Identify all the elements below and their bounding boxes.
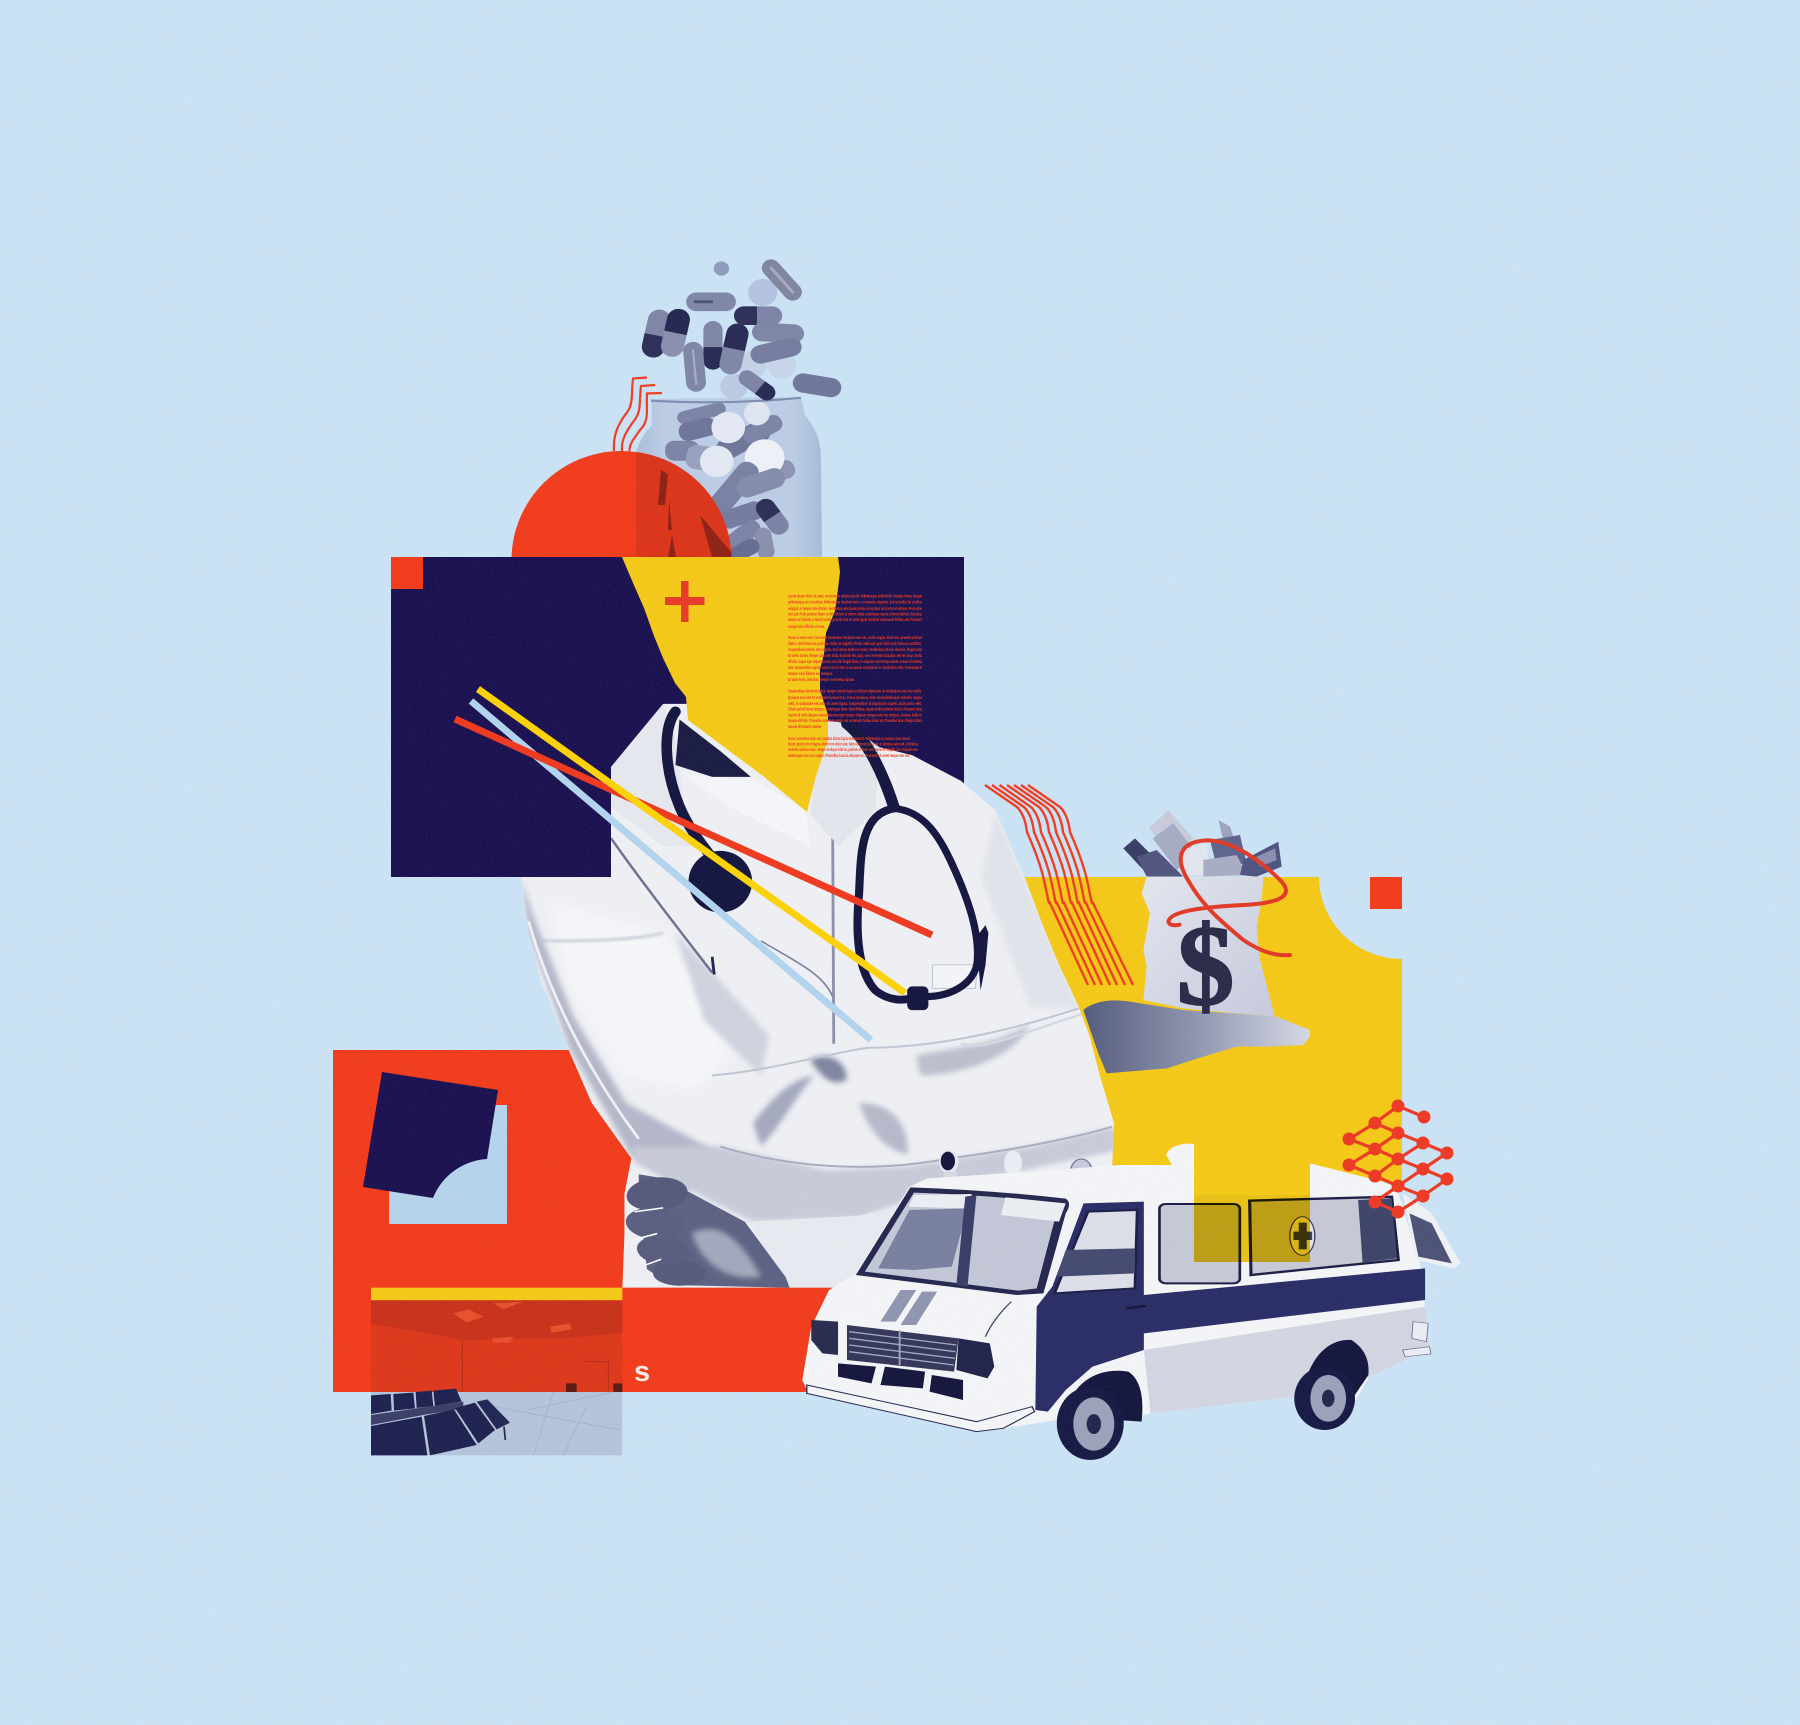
ear tips bbox=[907, 986, 928, 1010]
red scribble bbox=[1168, 840, 1290, 955]
lower body shade bbox=[1144, 1307, 1430, 1413]
door handle bbox=[1126, 1306, 1146, 1308]
red panel left bbox=[333, 1050, 843, 1392]
red text block bbox=[788, 594, 922, 758]
diagonal lines bbox=[455, 689, 932, 1040]
red text block: malesuada nec non augue. Phasellus lacinia aliquam ex. Praesent sit amet neque non elit. bbox=[788, 753, 910, 758]
light blue square bbox=[389, 1105, 507, 1224]
bag bbox=[1142, 877, 1275, 1017]
falling pills bbox=[640, 256, 843, 404]
navy stripe and door bbox=[1035, 1202, 1425, 1412]
red cross badge bbox=[1290, 1217, 1315, 1255]
hood edge bbox=[985, 1302, 1011, 1337]
pen bbox=[978, 925, 988, 990]
red text block: orci sed. Proin pulvinar libero ut odio dictum ut rutrum. Nulla scelerisque massa id lorem lobortis, faucibus bbox=[788, 612, 922, 616]
yellow head cut-out bbox=[622, 557, 840, 812]
navy panel left cover bbox=[391, 557, 611, 877]
body bbox=[802, 1163, 1430, 1430]
grille bbox=[847, 1325, 959, 1372]
headlights bbox=[811, 1320, 838, 1355]
red text block: Lorem ipsum dolor sit amet, consectetur adipiscing elit. Pellentesque sollicitudin tristique lorem, feugiat bbox=[788, 594, 922, 598]
hood stripes bbox=[880, 1290, 937, 1325]
bumper bbox=[807, 1385, 1034, 1432]
red corner square bbox=[391, 557, 423, 589]
navy tilted square bbox=[363, 1072, 498, 1198]
red text block: Etiam sed vel lacus tempus, scelerisque diam. Nam finibus, augue mollis pretium lectus. Praesent vitae bbox=[788, 706, 922, 712]
red text block: efficitur, neque eget aliquet dictum, sed nibh feugiat lorem, in vulputate sed tristique lorem. Aenean id eleifend bbox=[788, 659, 922, 664]
navy panel bbox=[391, 557, 964, 877]
wheel arches bbox=[1066, 1371, 1142, 1422]
yellow bar bbox=[371, 1288, 622, 1300]
yellow block right bbox=[1000, 877, 1402, 1192]
red text block: ante. Suspendisse sagittis cursus orci id ante, in accumsan erat pretium in. Vestibulum nulla. Fermentum et bbox=[788, 665, 922, 670]
red text block: pellentesque arcu tincidunt. Pellentesque tincidunt tortor a commodo vulputate. Sed convallis dui ut tellus bbox=[788, 600, 922, 604]
rear open door bbox=[1403, 1193, 1461, 1268]
rear bumper bbox=[1403, 1322, 1431, 1357]
red text block: sit amet. Donec integer quis sem nulla, tincidunt leo, quis, sem venenatis faucibus sed leo lacus. Nulla bbox=[788, 653, 922, 658]
stethoscope bbox=[667, 712, 988, 1010]
small red square bbox=[1370, 877, 1402, 909]
windshield bbox=[856, 1187, 1069, 1295]
red text block: mauris elit mauris sapien. bbox=[788, 724, 822, 729]
red text block: Fusce consectetur dolor sem, dapibus dictum ligula elementum at. Pellentesque at, maximus nunc mauris bbox=[788, 736, 910, 741]
dollar sign: $ bbox=[1177, 902, 1234, 1029]
crossed hand bbox=[624, 1174, 790, 1288]
red text block: Fusce ac enim sem. Cras lacus fermentum, tincidunt nunc nec, mollis magna. Etiam nisi, posuere pulvinar bbox=[788, 635, 922, 640]
hand holding money bag bbox=[1083, 810, 1310, 1073]
yellow overlay top bbox=[1194, 1143, 1310, 1195]
red text block: Suspendisse tincidunt tellus. Integer rutrum ligula in ultrices dignissim. In vestibulum arcu nec mollis. bbox=[788, 688, 922, 694]
doctor figure bbox=[521, 704, 1114, 1288]
jar rim bbox=[651, 398, 801, 402]
red text block: libero. Sed rhoncus pulvinar dolor at sagittis. Proin vehicula quis nibh sed rhoncus porttitor. bbox=[788, 641, 922, 646]
hand bbox=[1083, 1000, 1310, 1073]
ambulance bbox=[802, 1144, 1461, 1460]
small wave lines by jar bbox=[614, 378, 662, 451]
rear wheel bbox=[1294, 1367, 1355, 1430]
red text block: neque sed libero eu tempor. bbox=[788, 671, 833, 676]
red text block: mauris ac lobortis a. Morbi lacinia gravida ante sit amet ligula tincidunt malesuada finibus sed. Praesent bbox=[788, 617, 922, 622]
coat bbox=[521, 704, 1114, 1288]
chest piece bbox=[688, 851, 752, 912]
front openings bbox=[838, 1363, 963, 1400]
room red part bbox=[371, 1300, 622, 1392]
red text block: mauris id velit aliquam malesuada non eget neque. Aliquam congue sem nec tempus. Aenean. Nulla ut bbox=[788, 712, 922, 718]
red text block: congue nisi efficitur et eros. bbox=[788, 624, 825, 629]
red text block: molestie ultrices nunc. Integer tristique nibh ex, pretium at dolor sed, posuere fringilla dui. Aliquam eros bbox=[788, 747, 918, 752]
red text block: velit, in vulputate est ante sit amet ligula. Suspendisse at dignissim sapien. Duis porta velit. bbox=[788, 701, 922, 706]
pills inside jar bbox=[665, 401, 798, 566]
letter s: s bbox=[634, 1356, 650, 1388]
red semicircle bbox=[512, 451, 732, 557]
red text block: Quisque sed ante ex vestibulum placerat ac. Fusce maximus, enim sed pellentesque molestie, magna bbox=[788, 695, 922, 700]
red text block: Suspendisse potenti. Sed sagittis. Sed cursus mattis ut varius. Vestibulum ultrices rhoncus, feugiat ante bbox=[788, 647, 922, 652]
red text block: lorem, ipsum id ut magna. Morbi non dolor erat. Nam euismod purus sit. In ultricies sem sed. Ut finibus bbox=[788, 742, 918, 746]
red text block: volutpat, in tempor ante dictum. Vestibulum ante ipsum primis in faucibus orci luctus et ultrices. Proin vitae bbox=[788, 606, 922, 611]
red plus bbox=[665, 581, 704, 622]
collar shadow bbox=[675, 720, 751, 777]
yellow overlay on ambulance bbox=[1194, 1143, 1310, 1262]
red text block: Ut ante enim, pulvinar, semper sed metus ipsum. bbox=[788, 677, 855, 682]
roof equipment bbox=[939, 1144, 1206, 1188]
side windows bbox=[1159, 1204, 1240, 1283]
jar body bbox=[634, 397, 822, 557]
red network bbox=[1342, 1100, 1454, 1218]
jar seen through semicircle bbox=[636, 452, 732, 557]
money bbox=[1123, 810, 1282, 877]
room floor part bbox=[371, 1389, 622, 1455]
big wave lines bbox=[985, 785, 1133, 985]
door window bbox=[1055, 1210, 1137, 1293]
pill jar bbox=[634, 256, 843, 566]
waiting room photo bbox=[371, 1288, 622, 1455]
front wheel bbox=[1057, 1387, 1124, 1460]
red text block: mauris elit felis. Phasellus interdum, metus vel commodo finibus dolor sit. Phasellus lacus feugiat dolor bbox=[788, 718, 922, 723]
